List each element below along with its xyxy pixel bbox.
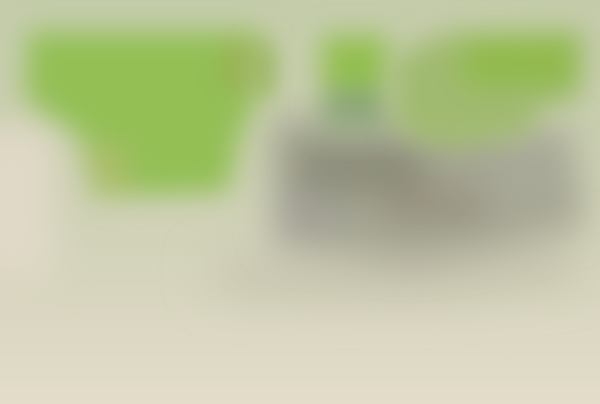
panel: grey lower right block (272, 118, 585, 262)
panel: right green block (392, 32, 585, 150)
panel: middle green block (322, 36, 388, 130)
panel: lower left pale area (0, 125, 55, 280)
panel: large green funnel (26, 32, 262, 196)
panel: left edge of middle green (252, 45, 274, 95)
panel: lower shadow (205, 235, 580, 295)
